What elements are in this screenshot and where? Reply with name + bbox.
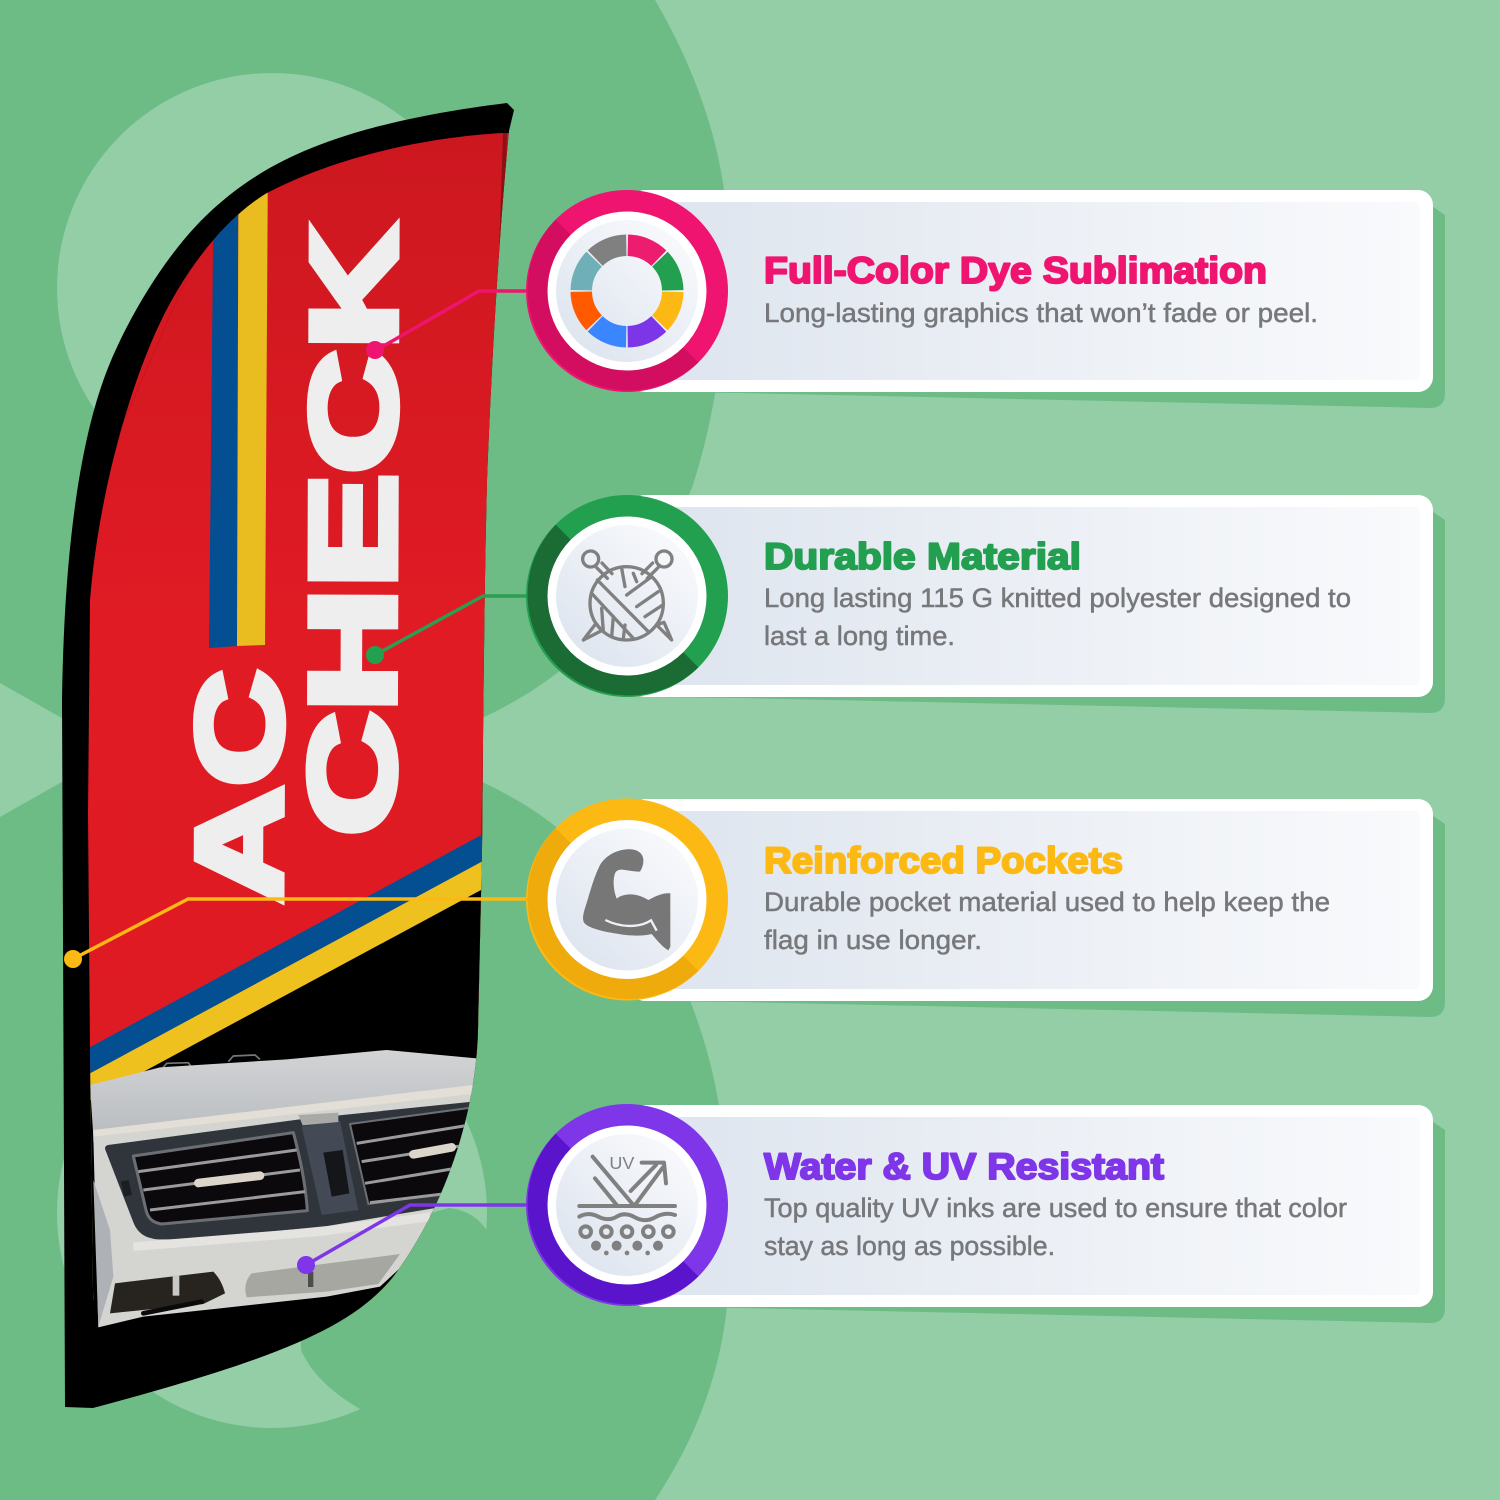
heading: Reinforced Pockets (764, 840, 1123, 881)
body text (764, 583, 1351, 651)
panel: Durable Material (630, 495, 1433, 697)
icon: color wheel (562, 226, 692, 356)
flag text: AC: AC (171, 670, 308, 903)
body text: Top quality UV inks are used to ensure that color (764, 1193, 1347, 1223)
heading: Full-Color Dye Sublimation (764, 250, 1267, 291)
body text: stay as long as possible. (764, 1231, 1055, 1261)
icon: UV shield: UV (609, 1153, 634, 1173)
flag (62, 103, 514, 1408)
connector: green (366, 596, 530, 664)
card 2 backing shadow (640, 510, 1445, 713)
body text: Long-lasting graphics that won’t fade or peel. (764, 298, 1318, 328)
body text: last a long time. (764, 621, 955, 651)
heading: Water & UV Resistant (764, 1146, 1164, 1187)
card 3 backing shadow (640, 814, 1445, 1017)
flag sleeve (50, 90, 530, 1420)
badge: color wheel (526, 190, 728, 392)
body text (764, 887, 1330, 955)
icon: yarn ball and needles (583, 551, 672, 640)
icon: flexed arm (583, 849, 670, 950)
connector: yellow (64, 899, 530, 968)
panel: Water & UV Resistant (630, 1105, 1433, 1307)
body text: Long lasting 115 G knitted polyester designed to (764, 583, 1351, 613)
icon: UV shield (579, 1153, 675, 1255)
panel: Full-Color Dye Sublimation (630, 190, 1433, 392)
flag fabric (88, 133, 509, 1407)
card 1 backing shadow (640, 205, 1445, 408)
flag text: CHECK: CHECK (284, 226, 422, 836)
connector: pink (366, 291, 530, 359)
connector: purple (297, 1205, 530, 1274)
body text: flag in use longer. (764, 925, 982, 955)
body text (764, 1193, 1347, 1261)
heading: Durable Material (764, 536, 1081, 577)
panel: Reinforced Pockets (630, 799, 1433, 1001)
body text: Durable pocket material used to help keep the (764, 887, 1330, 917)
badge: muscle (526, 798, 728, 1000)
badge: UV (526, 1104, 728, 1306)
card 4 backing shadow (640, 1120, 1445, 1323)
dashboard photo (90, 1050, 477, 1327)
badge: knitting (526, 495, 728, 697)
